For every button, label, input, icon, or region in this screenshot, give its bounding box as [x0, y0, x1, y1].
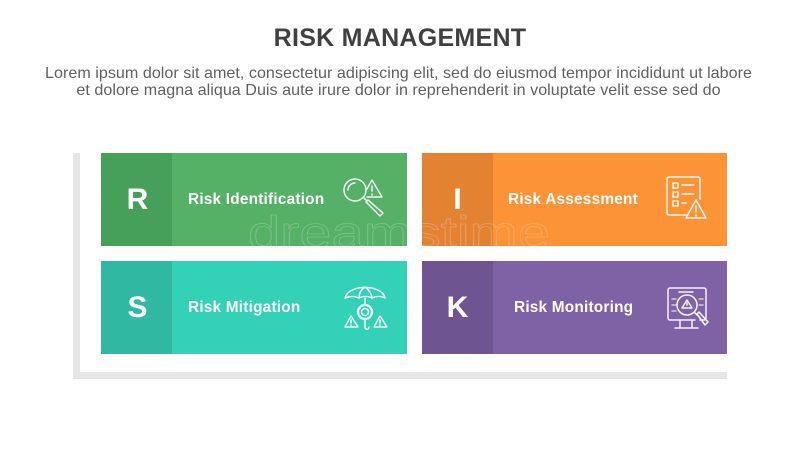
letter R: R [127, 183, 148, 216]
icon: umbrella with gear and warnings [344, 286, 388, 330]
letter R [101, 153, 172, 246]
letter S: S [127, 291, 148, 324]
letter S [101, 261, 172, 354]
letter I: I [453, 183, 462, 216]
panel: Risk Monitoring [422, 261, 727, 354]
panel: Risk Assessment [422, 153, 727, 246]
letter K: K [447, 291, 468, 324]
subtitle text: Lorem ipsum dolor sit amet, consectetur adipiscing elit, sed do eiusmod tempor incididunt ut labore [45, 64, 752, 82]
icon: checklist with warning [666, 176, 707, 219]
icon: magnifier with warning [343, 178, 384, 217]
letter K [422, 261, 493, 354]
subtitle text [45, 64, 752, 99]
label: Risk Monitoring: Risk Monitoring [514, 299, 633, 316]
panel: Risk Identification [101, 153, 407, 246]
label: Risk Assessment: Risk Assessment [508, 191, 638, 208]
panel: Risk Mitigation [101, 261, 407, 354]
letter I [422, 153, 493, 246]
subtitle text: et dolore magna aliqua Duis aute irure dolor in reprehenderit in voluptate velit esse sed do [76, 81, 721, 99]
watermark: dreamstime [248, 207, 550, 258]
label: Risk Identification: Risk Identification [188, 191, 324, 208]
label: Risk Mitigation: Risk Mitigation [188, 299, 300, 316]
title: RISK MANAGEMENT [274, 24, 526, 52]
icon: monitor with magnifier and warning [667, 287, 709, 329]
